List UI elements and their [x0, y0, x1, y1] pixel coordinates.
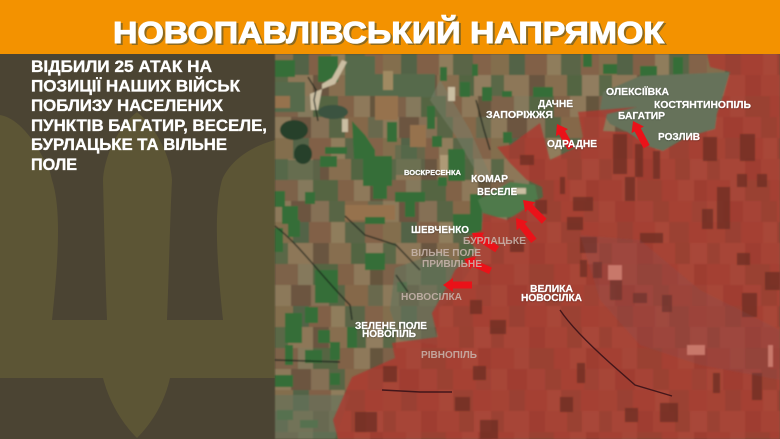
- pale patches: [310, 60, 526, 194]
- trident emblem: [0, 112, 275, 438]
- label: Новосілка east: НОВОСІЛКА: [521, 292, 582, 304]
- arrow: Веселе: [518, 195, 549, 226]
- occupied territory red overlay: [333, 54, 780, 439]
- arrow: Привільне: [461, 253, 493, 277]
- title shadow: НОВОПАВЛІВСЬКИЙ НАПРЯМОК: [115, 16, 666, 52]
- line 4: ПУНКТІВ БАГАТИР, ВЕСЕЛЕ,: [31, 117, 267, 135]
- header bar: [0, 0, 780, 54]
- creeks in red zone: [382, 310, 672, 396]
- arrow: Новосілка: [443, 278, 472, 292]
- darker fields in red zone: [355, 134, 780, 439]
- purple-tinted valley band: [580, 235, 780, 380]
- label: Воскресенка: ВОСКРЕСЕНКА: [404, 168, 462, 177]
- line 6: ПОЛЕ: [31, 156, 77, 174]
- label: Бурлацьке: БУРЛАЦЬКЕ: [463, 235, 526, 247]
- label: Зелене Поле: ЗЕЛЕНЕ ПОЛЕ: [355, 320, 427, 332]
- pale fields in red zone: [608, 265, 773, 367]
- title text: НОВОПАВЛІВСЬКИЙ НАПРЯМОК: [113, 14, 664, 50]
- label: Новосілка: НОВОСІЛКА: [401, 291, 462, 303]
- line 1: ВІДБИЛИ 25 АТАК НА: [31, 58, 212, 76]
- arrow: south of Веселе: [510, 214, 539, 245]
- arrow: Бурлацьке: [468, 227, 501, 255]
- label: Привільне: ПРИВІЛЬНЕ: [422, 258, 482, 270]
- label: Костянтинопіль: КОСТЯНТИНОПІЛЬ: [654, 99, 751, 111]
- label: Вільне Поле: ВІЛЬНЕ ПОЛЕ: [411, 247, 481, 259]
- arrow: Багатир: [627, 118, 653, 150]
- label: Велика: ВЕЛИКА: [530, 283, 573, 295]
- label: Шевченко: ШЕВЧЕНКО: [411, 224, 469, 236]
- label: Запоріжжя: ЗАПОРІЖЖЯ: [486, 109, 553, 121]
- label: Рівнопіль: РІВНОПІЛЬ: [421, 349, 477, 361]
- summary text: [31, 58, 267, 174]
- label: Комар: КОМАР: [471, 173, 508, 185]
- line 5: БУРЛАЦЬКЕ ТА ВІЛЬНЕ: [31, 136, 227, 154]
- wooded areas: [280, 105, 348, 164]
- label: Дачне: ДАЧНЕ: [538, 98, 573, 110]
- green fields: [275, 54, 683, 428]
- left panel background: [0, 54, 275, 439]
- occupied settlement labels: [401, 235, 526, 361]
- satellite map: [275, 54, 780, 439]
- grey settlement belts: [275, 72, 730, 439]
- attack arrows: [443, 118, 653, 292]
- label: Веселе: ВЕСЕЛЕ: [477, 186, 517, 198]
- label: Багатир: БАГАТИР: [618, 110, 665, 122]
- label: Олексіївка: ОЛЕКСІЇВКА: [606, 85, 669, 98]
- arrow: Одрадне: [551, 120, 577, 152]
- line 3: ПОБЛИЗУ НАСЕЛЕНИХ: [31, 97, 223, 115]
- label: Новопіль: НОВОПІЛЬ: [362, 328, 416, 340]
- map labels: [355, 85, 751, 340]
- title: [113, 14, 666, 52]
- label: Розлив: РОЗЛИВ: [658, 131, 700, 143]
- line 2: ПОЗИЦІЇ НАШИХ ВІЙСЬК: [31, 76, 241, 96]
- label: Одрадне: ОДРАДНЕ: [547, 138, 597, 150]
- map base farmland: [275, 54, 780, 439]
- brown fields: [275, 71, 448, 220]
- muted grey-green fields: [275, 56, 435, 180]
- rivers: [275, 77, 490, 362]
